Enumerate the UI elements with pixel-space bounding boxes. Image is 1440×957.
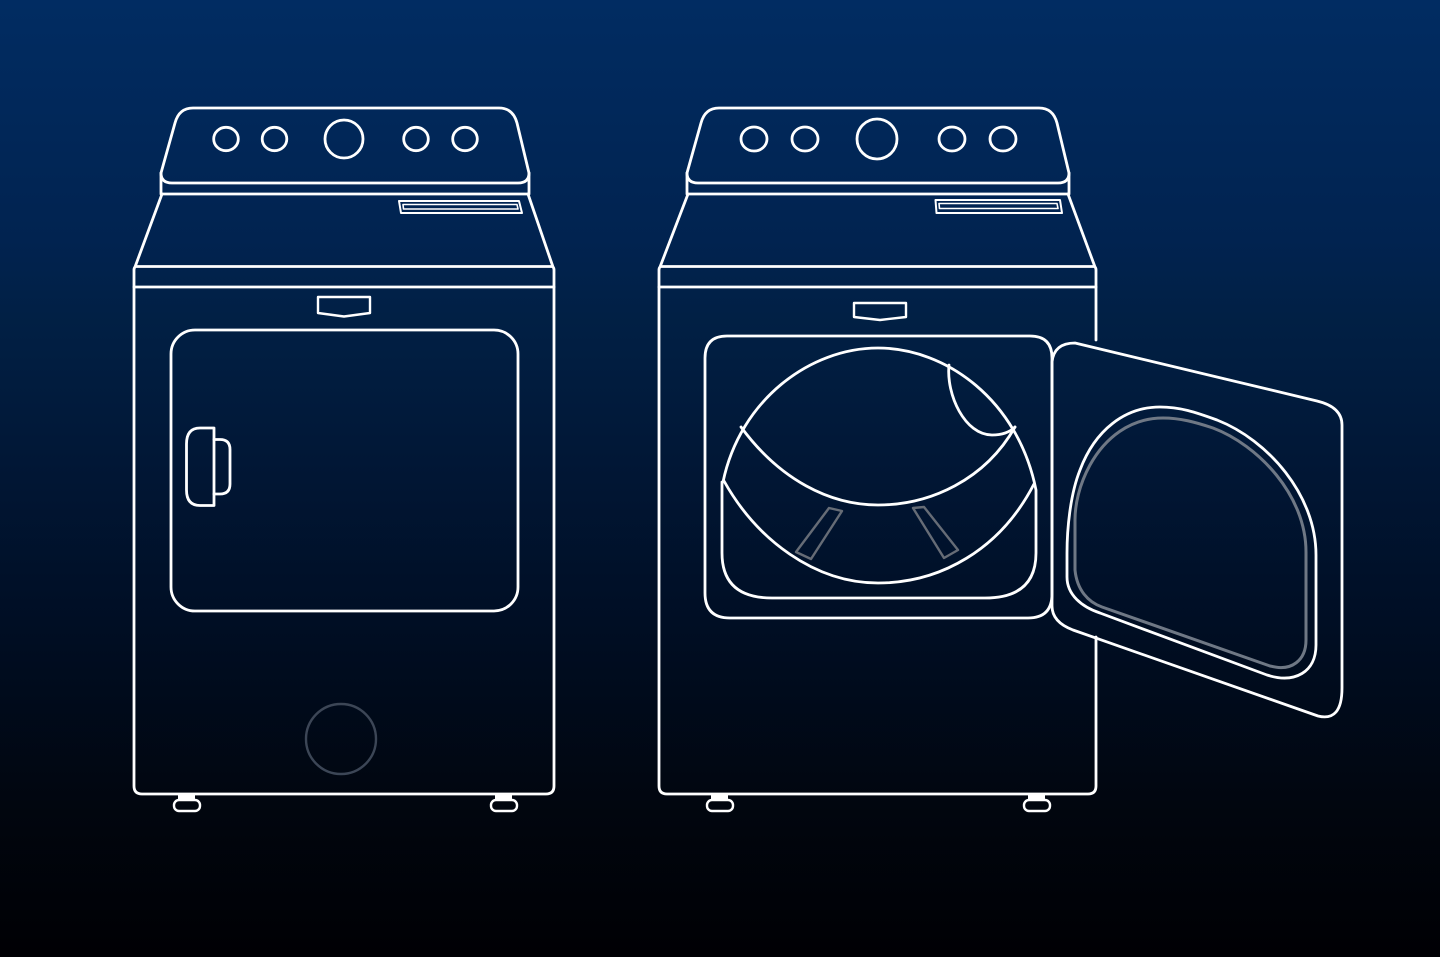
lower circle badge <box>306 704 376 774</box>
left foot <box>174 795 200 811</box>
drum baffles <box>796 507 958 559</box>
cabinet body <box>659 194 1096 794</box>
door handle <box>186 428 230 506</box>
left foot <box>707 795 733 811</box>
control panel <box>161 108 529 194</box>
right foot <box>1024 795 1050 811</box>
door latch plate <box>318 297 370 316</box>
door inner seal <box>1075 418 1306 668</box>
right foot <box>491 795 517 811</box>
lint filter slot <box>399 201 522 213</box>
cabinet body <box>134 194 554 794</box>
lint filter slot <box>936 200 1062 213</box>
latch plate <box>854 303 906 320</box>
control panel <box>687 108 1069 194</box>
open door panel <box>1052 343 1342 717</box>
door <box>171 330 518 611</box>
dryer: open door <box>659 108 1342 811</box>
door opening <box>705 336 1052 618</box>
dryer: closed door, front view <box>134 108 554 811</box>
drum <box>722 348 1036 598</box>
